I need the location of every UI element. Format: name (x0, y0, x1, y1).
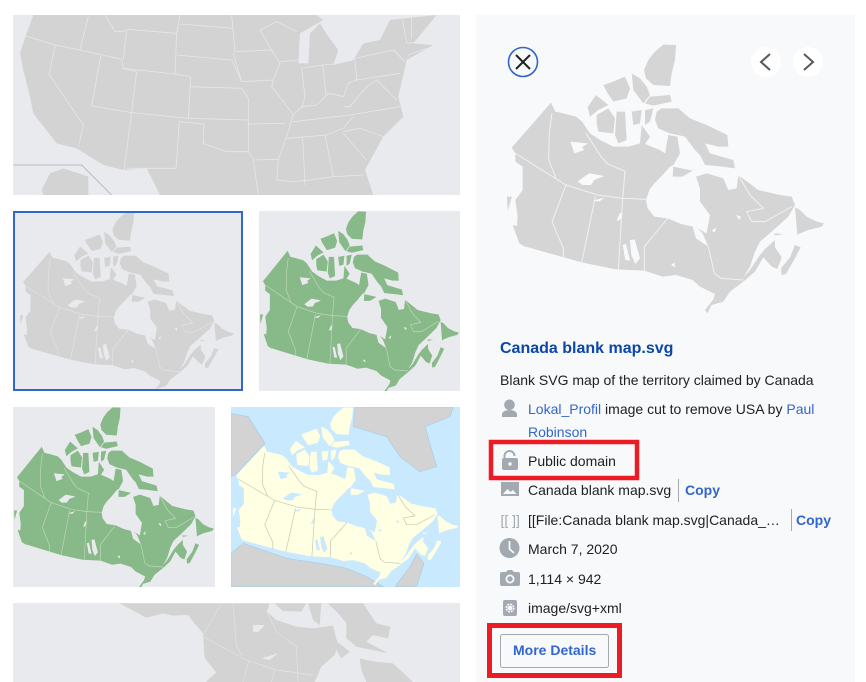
text: file name: Canada blank map.svg (528, 482, 671, 498)
icon: next arrow (793, 47, 823, 77)
icon: image (501, 482, 519, 496)
text: date: March 7, 2020 (528, 541, 618, 557)
icon: person (502, 400, 517, 417)
thumbnail: green Canada map (259, 211, 460, 394)
callout: more details highlight (490, 626, 620, 676)
button: more details (500, 634, 608, 668)
row: date (500, 538, 618, 558)
link: copy: Copy (685, 482, 720, 498)
thumbnail: Canada location map (231, 407, 460, 587)
icon: previous arrow (751, 47, 781, 77)
row: wikitext (500, 509, 831, 531)
text: public domain: Public domain (528, 453, 616, 469)
thumbnail: selected Canada blank map (13, 211, 243, 394)
icon: open lock (502, 451, 518, 470)
thumbnail: green Canada map, second version (13, 407, 215, 590)
divider (678, 479, 679, 502)
text: description: Blank SVG map of the territory claimed by Canada (500, 372, 814, 388)
text: wikitext: [[File:Canada blank map.svg|Canada_… (528, 512, 780, 528)
panel: image result grid (13, 15, 460, 682)
text: author credit: Robinson (528, 424, 587, 440)
row: author (502, 400, 814, 440)
large Canada map preview (507, 45, 824, 313)
button: more details: More Details (513, 642, 596, 658)
callout: public domain highlight (491, 442, 637, 478)
row: license (502, 451, 616, 470)
row: file type (503, 600, 622, 616)
heading: file title: Canada blank map.svg (500, 340, 673, 357)
thumbnail: USA blank map (13, 15, 460, 195)
link: copy: Copy (796, 512, 831, 528)
panel background (476, 15, 855, 682)
row: file name (501, 479, 720, 502)
icon: gear file (503, 600, 517, 616)
divider (791, 509, 792, 531)
icon: clock (500, 538, 520, 558)
text: dimensions: 1,114 × 942 (528, 571, 602, 587)
thumbnail: North America map, bottom row (13, 603, 460, 682)
icon: camera (500, 570, 520, 586)
text: file type: image/svg+xml (528, 600, 622, 616)
icon: close button (508, 48, 538, 76)
panel: image details (476, 15, 855, 682)
text: author credit: Lokal_Profil image cut to remove USA by Paul (528, 401, 814, 417)
row: dimensions (500, 570, 602, 587)
icon: wikitext brackets: [[ ]] (500, 512, 520, 528)
